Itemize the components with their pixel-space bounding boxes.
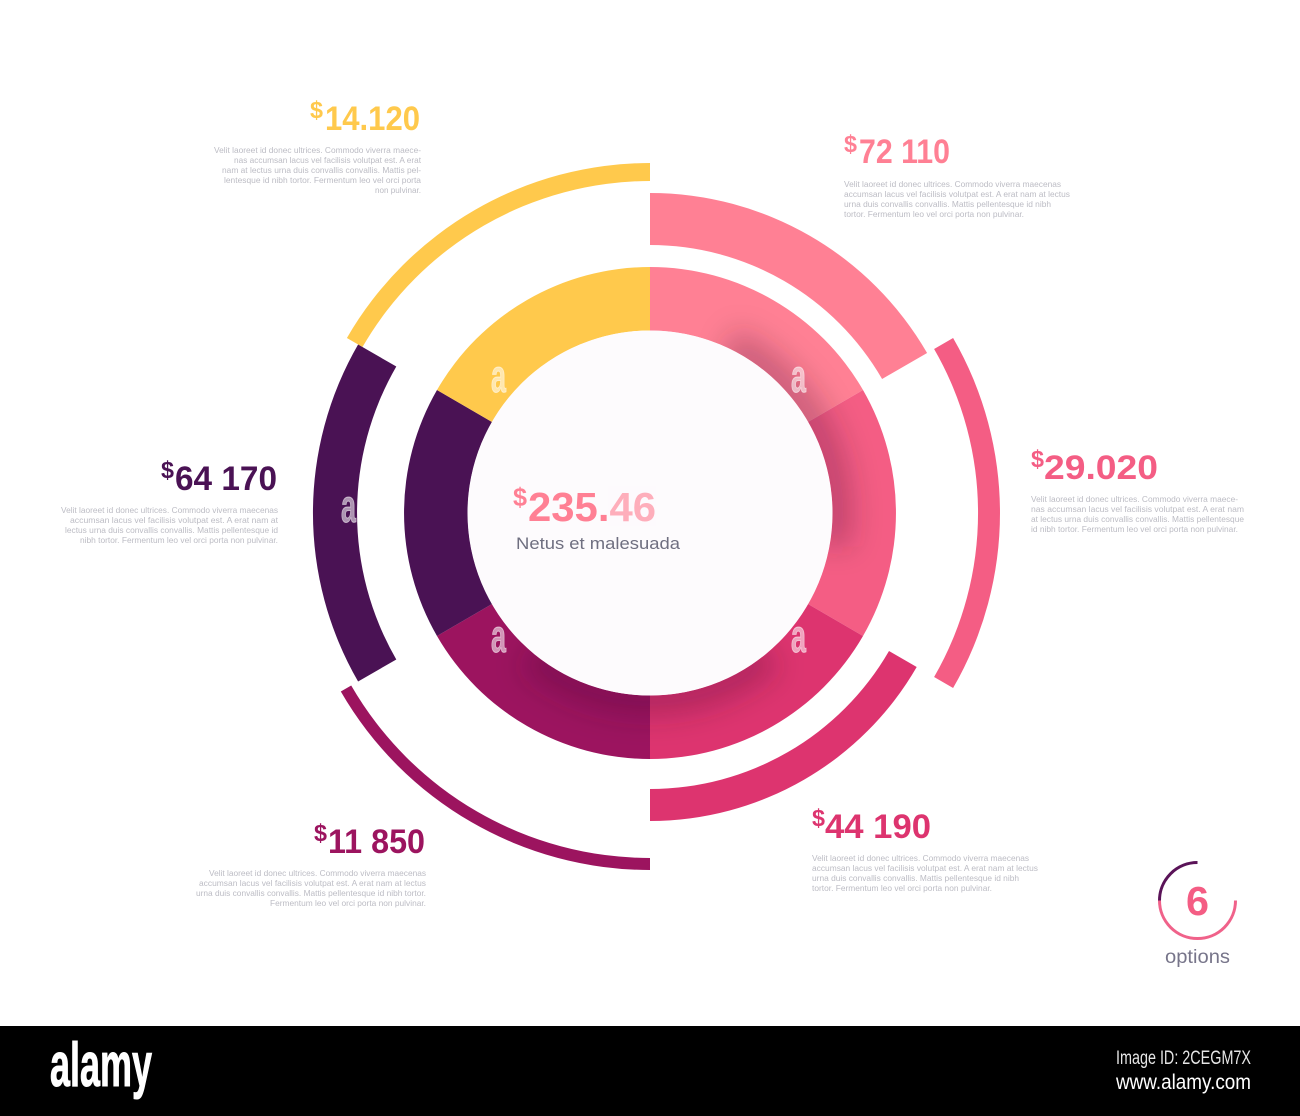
callout: yellow 14.120: Velit laoreet id donec ultrices. Commodo viverra maece- bbox=[214, 145, 421, 155]
callout: pink 29.020: Velit laoreet id donec ultrices. Commodo viverra maece- bbox=[1031, 494, 1238, 504]
callout: crimson 44 190: Velit laoreet id donec ultrices. Commodo viverra maecenas bbox=[812, 853, 1029, 863]
callout: magenta 11 850: urna duis convallis convallis. Mattis pellentesque id nibh tortor. bbox=[196, 888, 426, 898]
segment: crimson bbox=[650, 604, 863, 759]
callout: purple 64 170: lectus urna duis convallis convallis. Mattis pellentesque id bbox=[65, 525, 278, 535]
options badge bbox=[1160, 862, 1236, 968]
callout: magenta 11 850: Fermentum leo vel orci porta non pulvinar. bbox=[270, 898, 426, 908]
callout: magenta 11 850: $ bbox=[314, 820, 328, 847]
watermark glyphs: a bbox=[791, 350, 806, 402]
watermark glyphs bbox=[341, 350, 806, 662]
callout: light pink 72 110: 72 110 bbox=[859, 133, 950, 171]
outer arc: yellow bbox=[347, 163, 650, 347]
watermark glyphs: a bbox=[791, 610, 806, 662]
badge ring bbox=[1160, 862, 1236, 939]
callout: magenta 11 850: Velit laoreet id donec ultrices. Commodo viverra maecenas bbox=[209, 868, 426, 878]
watermark glyphs: a bbox=[491, 350, 506, 402]
watermark glyphs: a bbox=[341, 480, 356, 532]
callout: crimson 44 190: tortor. Fermentum leo vel orci porta non pulvinar. bbox=[812, 883, 992, 893]
total value: $ bbox=[513, 482, 528, 512]
segment: purple bbox=[404, 390, 492, 636]
total value: 235.46 bbox=[528, 484, 656, 530]
footer logo: alamy bbox=[50, 1031, 152, 1100]
total label: Netus et malesuada bbox=[516, 534, 681, 553]
callout: pink 29.020: nas accumsan lacus vel facilisis volutpat est. A erat nam bbox=[1031, 504, 1244, 514]
outer arc: crimson bbox=[650, 651, 917, 821]
badge number: 6 bbox=[1186, 878, 1209, 924]
callout: light pink 72 110: Velit laoreet id donec ultrices. Commodo viverra maecenas bbox=[844, 179, 1061, 189]
outer arc: pink bbox=[934, 338, 1000, 688]
footer bar bbox=[0, 1026, 1300, 1116]
callout: pink 29.020 bbox=[1031, 446, 1244, 534]
segment: pink bbox=[808, 390, 896, 636]
inner ring shadows bbox=[532, 347, 833, 696]
callout: purple 64 170 bbox=[61, 457, 279, 545]
callout: pink 29.020: $ bbox=[1031, 446, 1045, 473]
callout: crimson 44 190: urna duis convallis convallis. Mattis pellentesque id nibh bbox=[812, 873, 1019, 883]
segment: light pink bbox=[650, 267, 863, 422]
callout: magenta 11 850: 11 850 bbox=[328, 823, 425, 861]
callout: crimson 44 190: 44 190 bbox=[825, 808, 931, 846]
callout: purple 64 170: accumsan lacus vel facilisis volutpat est. A erat nam at bbox=[70, 515, 279, 525]
callout: light pink 72 110 bbox=[844, 131, 1070, 219]
outer arc: magenta bbox=[341, 686, 650, 870]
segment: yellow bbox=[437, 267, 650, 422]
callout: yellow 14.120: $ bbox=[310, 97, 324, 124]
callout: crimson 44 190: accumsan lacus vel facilisis volutpat est. A erat nam at lectus bbox=[812, 863, 1038, 873]
outer arc: light pink bbox=[650, 193, 927, 379]
callout: purple 64 170: nibh tortor. Fermentum leo vel orci porta non pulvinar. bbox=[80, 535, 278, 545]
callout: light pink 72 110: $ bbox=[844, 131, 858, 158]
callout: yellow 14.120: non pulvinar. bbox=[375, 185, 421, 195]
callout: yellow 14.120: nam at lectus urna duis convallis convallis. Mattis pel- bbox=[222, 165, 421, 175]
image id: Image ID: 2CEGM7X bbox=[1116, 1048, 1251, 1069]
callout: pink 29.020: 29.020 bbox=[1044, 449, 1158, 487]
callout: purple 64 170: 64 170 bbox=[175, 460, 277, 498]
watermark glyphs: a bbox=[491, 610, 506, 662]
donut chart: inner ring bbox=[404, 267, 896, 759]
callout: light pink 72 110: accumsan lacus vel facilisis volutpat est. A erat nam at lectus bbox=[844, 189, 1070, 199]
callout: purple 64 170: Velit laoreet id donec ultrices. Commodo viverra maecenas bbox=[61, 505, 278, 515]
callout: crimson 44 190 bbox=[812, 805, 1038, 893]
callout: yellow 14.120: 14.120 bbox=[325, 100, 420, 138]
callout: yellow 14.120: lentesque id nibh tortor. Fermentum leo vel orci porta bbox=[224, 175, 421, 185]
outer arc: purple bbox=[313, 344, 396, 682]
website: www.alamy.com bbox=[1115, 1071, 1251, 1094]
center circle bbox=[468, 330, 832, 696]
callout: light pink 72 110: tortor. Fermentum leo vel orci porta non pulvinar. bbox=[844, 209, 1024, 219]
callout: pink 29.020: at lectus urna duis convallis convallis. Mattis pellentesque bbox=[1031, 514, 1244, 524]
segment: magenta bbox=[437, 604, 650, 759]
callout: pink 29.020: id nibh tortor. Fermentum leo vel orci porta non pulvinar. bbox=[1031, 524, 1238, 534]
callout: light pink 72 110: urna duis convallis convallis. Mattis pellentesque id nibh bbox=[844, 199, 1051, 209]
callout: purple 64 170: $ bbox=[161, 457, 175, 484]
callout: magenta 11 850 bbox=[196, 820, 426, 908]
callout: crimson 44 190: $ bbox=[812, 805, 826, 832]
callout: magenta 11 850: accumsan lacus vel facilisis volutpat est. A erat nam at lectus bbox=[199, 878, 426, 888]
badge label: options bbox=[1165, 947, 1230, 968]
callout: yellow 14.120: nas accumsan lacus vel facilisis volutpat est. A erat bbox=[234, 155, 422, 165]
callout: yellow 14.120 bbox=[214, 97, 422, 195]
